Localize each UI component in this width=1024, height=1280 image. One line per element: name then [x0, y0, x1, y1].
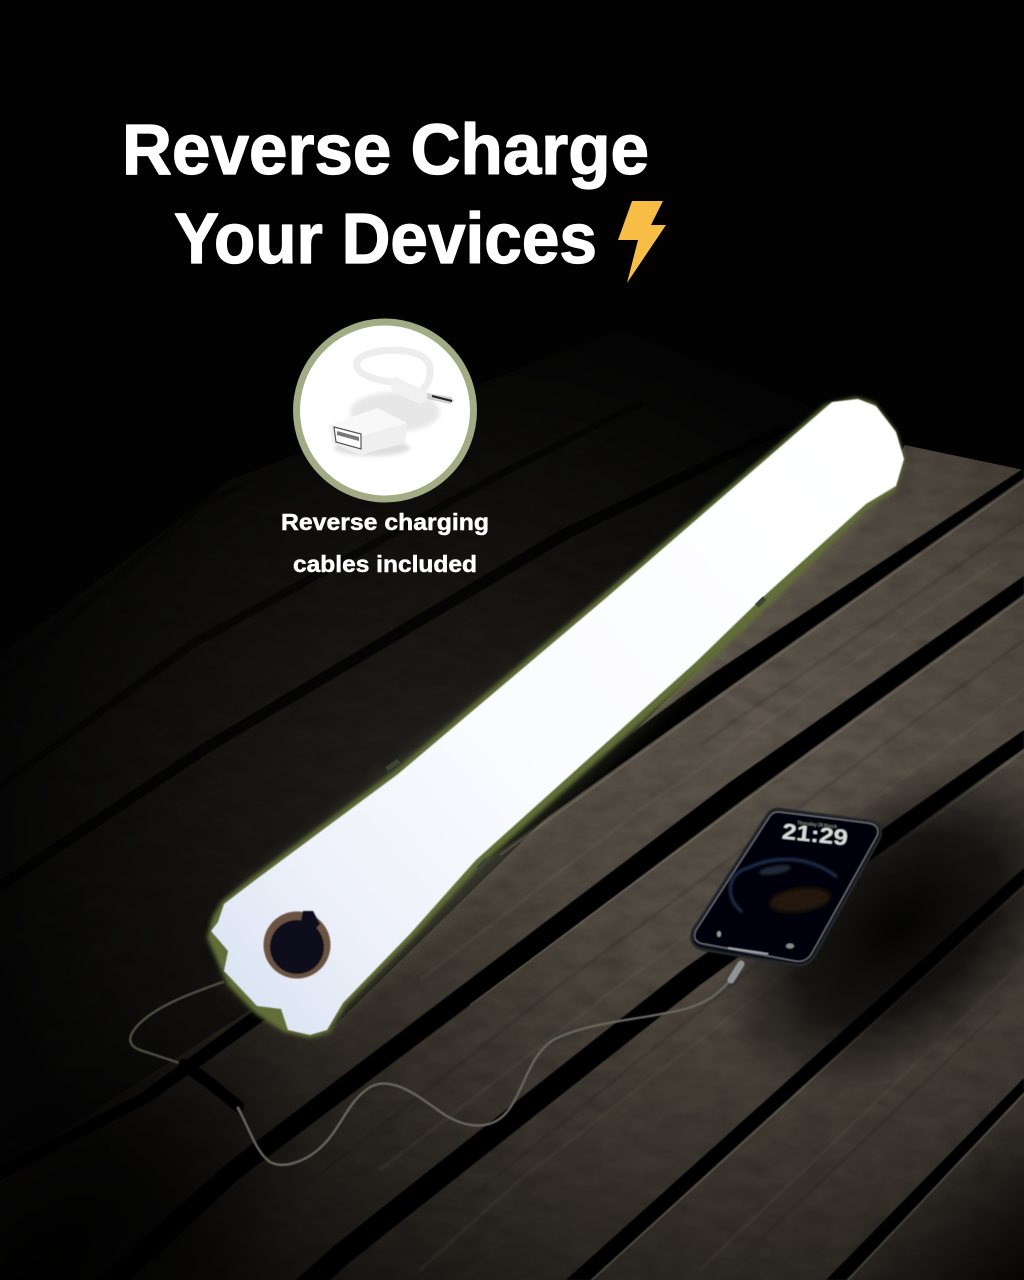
shadow around the phone: [732, 768, 1024, 1082]
lamp seam tabs: [385, 596, 766, 870]
plank lit edges: [470, 481, 1024, 1280]
cable shadow: [350, 392, 440, 432]
lamp: inflatable glowing light tube: [207, 397, 905, 1038]
title: [122, 111, 649, 279]
phone camera button: [786, 944, 794, 948]
lightning connector: [731, 964, 741, 980]
USB-A port contact: [337, 431, 359, 441]
unlit planks behind the lamp: [50, 409, 718, 1072]
phone: [691, 809, 881, 965]
title line 1: Reverse Charge: [122, 111, 649, 190]
lamp white body: [211, 399, 904, 1035]
lamp glow on table: [225, 415, 890, 1035]
photo: wooden table: [54, 415, 1024, 1280]
thin cable from lamp to adapter: [130, 982, 223, 1064]
title line 2: Your Devices: [174, 200, 597, 279]
black cable adapter: [184, 1065, 238, 1106]
USB-A adapter shadow: [334, 440, 410, 456]
shadow at bottom right corner: [868, 1136, 1024, 1280]
lamp power socket: [264, 911, 330, 978]
USB-C plug tip: [427, 393, 454, 404]
caption: [281, 509, 489, 577]
phone clock: 21:29: [781, 819, 849, 850]
USB-A adapter body: [330, 425, 406, 454]
phone home bar: [728, 948, 768, 954]
caption line 2: cables included: [293, 551, 477, 577]
wood grain streaks: [382, 533, 1022, 1269]
charging cable from lamp to phone: [130, 964, 741, 1165]
icon: USB cable: [330, 350, 454, 456]
phone torch button: [717, 931, 721, 937]
USB-C slot: [432, 396, 452, 401]
cable loop: [357, 350, 430, 398]
phone screen rim: [695, 812, 878, 961]
icon: lightning bolt: [618, 201, 666, 283]
plank gaps: [62, 470, 1024, 1280]
caption line 1: Reverse charging: [281, 509, 489, 535]
phone date: Thursday 28 March: [797, 820, 837, 830]
USB-C plug housing: [390, 377, 427, 404]
shadow at bottom left corner: [10, 1250, 79, 1280]
USB-A adapter top: [330, 408, 407, 436]
wallpaper planet: [730, 859, 839, 925]
product inset: reverse charging cable: [296, 322, 474, 499]
wood mottled texture: [379, 446, 1024, 1174]
phone body: [691, 809, 881, 965]
lamp green fabric edge: [207, 397, 905, 1038]
USB-A port: [334, 427, 361, 449]
long cable to phone: [238, 980, 730, 1165]
inner link between plug and adapter: [402, 398, 412, 412]
lit planks below the lamp: [148, 445, 1024, 1280]
inset ring: [296, 322, 474, 499]
